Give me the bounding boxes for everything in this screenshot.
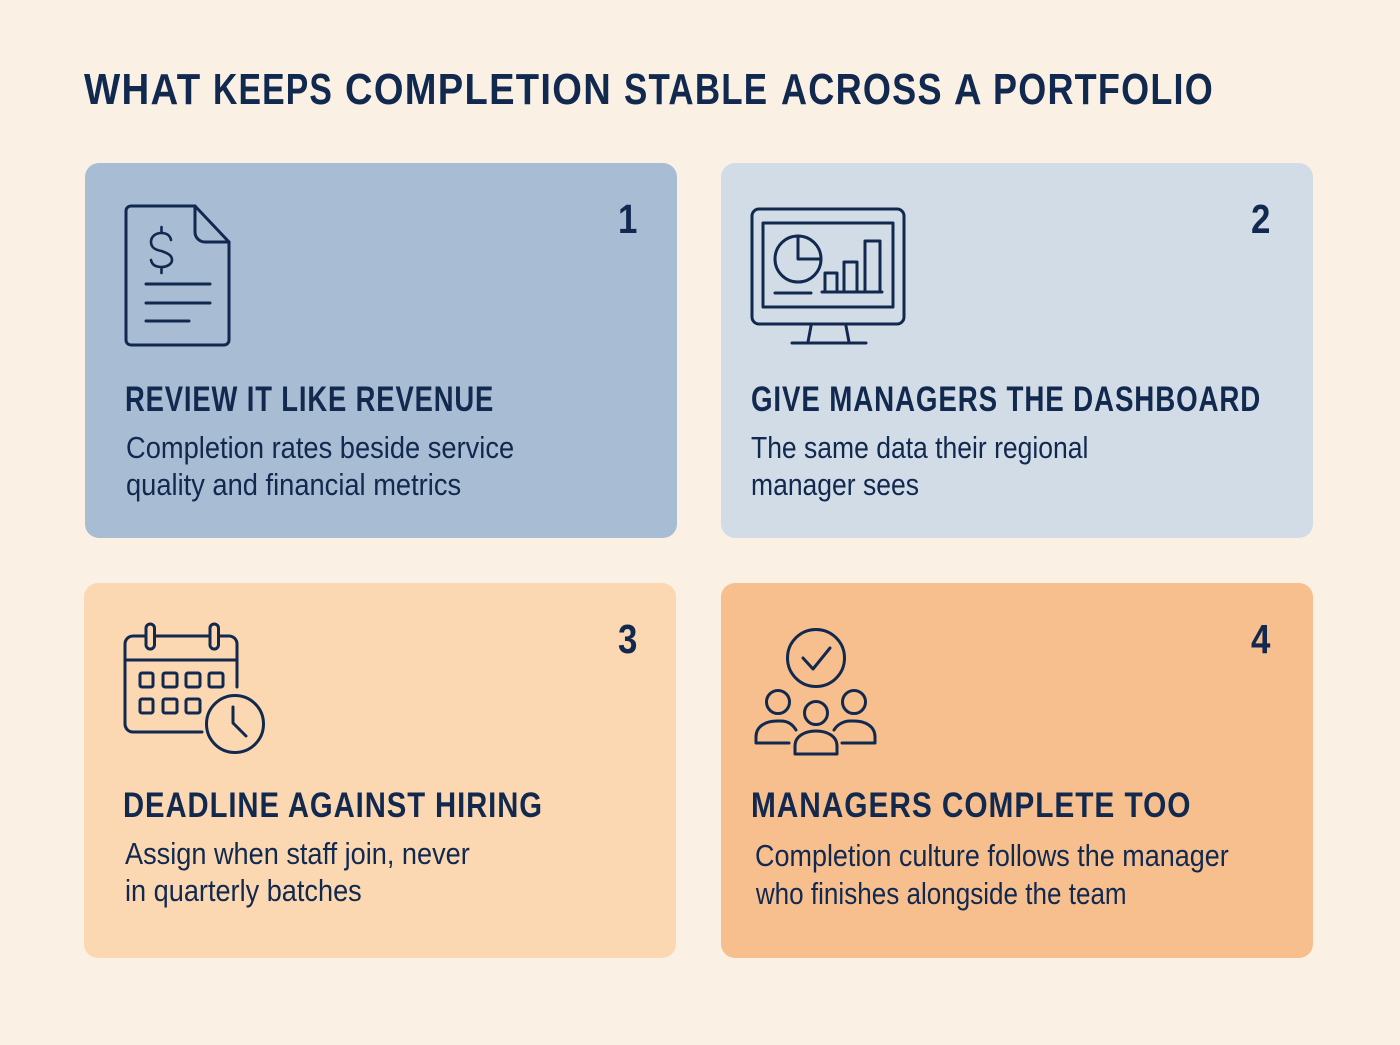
title: WHAT [84,65,201,114]
icon: invoice document [124,204,230,346]
number 1: 1 [618,196,637,242]
body text: manager sees [751,467,919,502]
body text [755,838,1229,911]
icon: calendar with clock [124,622,265,754]
heading: MANAGERS COMPLETE TOO [751,786,1191,825]
panel: give managers the dashboard [721,163,1313,538]
heading: REVIEW IT LIKE REVENUE [125,380,494,419]
body text [126,430,514,502]
body text [125,836,470,908]
number 4: 4 [1251,616,1270,662]
panel: managers complete too [721,583,1313,958]
number 3: 3 [618,616,637,662]
title: PORTFOLIO [993,65,1214,114]
body text: Assign when staff join, never [125,836,470,871]
icon: team with check [754,628,876,756]
heading: GIVE MANAGERS THE DASHBOARD [751,380,1261,419]
panel: deadline against hiring [84,583,676,958]
title [84,65,1214,114]
icon: monitor dashboard [750,208,906,344]
body text [751,430,1088,502]
body text: The same data their regional [751,430,1088,465]
title: STABLE [624,65,768,114]
number 2: 2 [1251,196,1270,242]
body text: in quarterly batches [125,873,362,908]
panel: review it like revenue [85,163,677,538]
title: A [954,65,983,114]
body text: who finishes alongside the team [756,876,1127,911]
title: ACROSS [781,65,943,114]
body text: quality and financial metrics [126,467,461,502]
title: COMPLETION [345,65,612,114]
body text: Completion rates beside service [126,430,514,465]
title: KEEPS [213,65,333,114]
body text: Completion culture follows the manager [755,838,1229,873]
heading: DEADLINE AGAINST HIRING [123,786,543,825]
